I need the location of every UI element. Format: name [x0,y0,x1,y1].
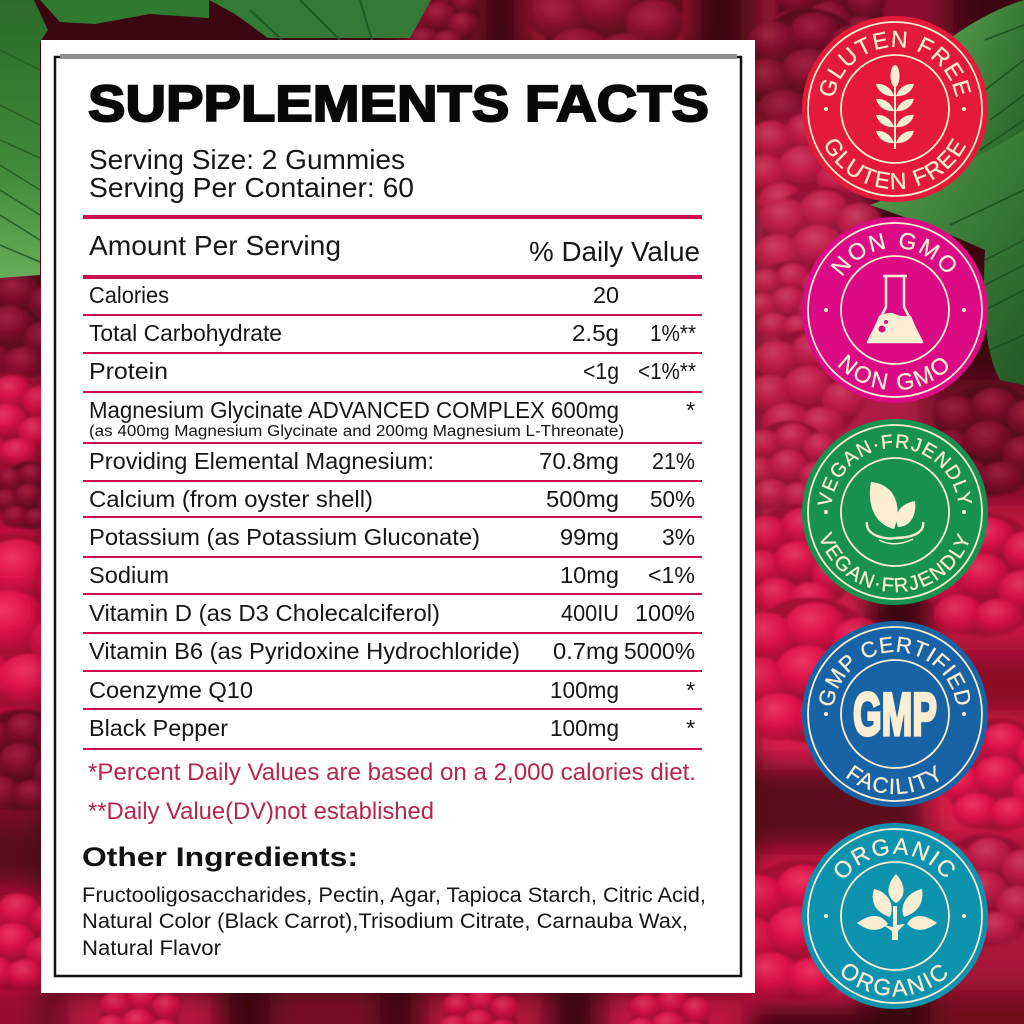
other ingredients list: Natural Flavor [82,937,221,960]
row: coenzyme q10: * [686,677,695,703]
badge: vegan friendly: VEGAN·FRJENDLY [817,434,972,505]
table header: % Daily Value [529,236,700,267]
label frame [55,54,741,976]
row: black pepper: 100mg [550,715,619,741]
badge: non gmo: NON GMO [838,354,948,390]
badge: gluten free [802,16,988,202]
badge: gluten free: GLUTEN FREE [820,30,972,97]
row: potassium: 3% [662,524,695,550]
other ingredients list: Natural Color (Black Carrot),Trisodium Citrate, Carnauba Wax, [82,910,688,933]
row: sodium: <1% [648,562,695,588]
row: protein [89,358,696,384]
row: carbohydrate: Total Carbohydrate [89,320,282,346]
leaf: top left [0,0,431,278]
row: calcium [89,486,695,512]
row: elemental magnesium: Providing Elemental Magnesium: [89,448,434,474]
row: potassium: Potassium (as Potassium Gluconate) [89,524,480,550]
badge: gmp certified [802,621,988,807]
row: vitamin d: 100% [635,600,695,626]
icon: flask [868,276,922,342]
row: vitamin b6: 0.7mg [553,638,619,664]
panel: supplement facts label [41,40,755,993]
row: elemental magnesium: 70.8mg [539,448,619,474]
row: protein: Protein [89,358,168,384]
serving information [89,144,414,203]
footnotes [88,759,696,825]
row: vitamin d [89,600,695,626]
other ingredients list: Fructooligosaccharides, Pectin, Agar, Tapioca Starch, Citric Acid, [82,884,706,907]
row: potassium: 99mg [560,524,619,550]
badge: gluten free: GLUTEN FREE [826,138,966,190]
title: SUPPLEMENTS FACTS [88,75,709,132]
row: elemental magnesium [89,448,695,474]
badge: organic [802,823,988,1009]
row: calcium: 50% [650,486,695,512]
row: magnesium glycinate: Magnesium Glycinate ADVANCED COMPLEX 600mg [89,397,619,423]
row: black pepper [89,715,695,741]
row: elemental magnesium: 21% [652,448,695,474]
row: calories: 20 [593,282,619,308]
footnotes: *Percent Daily Values are based on a 2,000 calories diet. [88,759,696,786]
row: sodium [89,562,695,588]
row: sodium: Sodium [89,562,169,588]
row: calcium: 500mg [546,486,619,512]
serving information: Serving Size: 2 Gummies [89,144,405,175]
icon: GMP lettering: GMP [853,681,937,748]
row: magnesium glycinate: * [686,397,695,423]
row: coenzyme q10: Coenzyme Q10 [89,677,253,703]
badge: gmp certified: GMP CERTIFIED [819,636,970,706]
badge: vegan friendly [802,419,988,605]
badge: vegan friendly: VEGAN·FRJENDLY [820,531,969,592]
row: black pepper: * [686,715,695,741]
row: calcium: Calcium (from oyster shell) [89,486,373,512]
other ingredients heading: Other Ingredients: [82,842,358,872]
row: vitamin b6: 5000% [624,638,695,664]
badge: organic: ORGANIC [842,964,947,997]
row: carbohydrate [89,320,696,346]
row: coenzyme q10 [89,677,695,703]
row: protein: <1g [583,358,619,384]
row: vitamin b6: Vitamin B6 (as Pyridoxine Hydrochloride) [89,638,520,664]
row: coenzyme q10: 100mg [550,677,619,703]
serving information: Serving Per Container: 60 [89,172,414,203]
row: vitamin d: Vitamin D (as D3 Cholecalciferol) [89,600,440,626]
row: calories [89,282,619,308]
icon: sprouting tree [857,874,937,940]
row: carbohydrate: 1%** [650,320,696,346]
badge: non gmo: NON GMO [830,232,956,276]
row: calories: Calories [89,282,169,308]
row: magnesium glycinate: (as 400mg Magnesium Glycinate and 200mg Magnesium L-Threonate) [89,423,624,440]
row: black pepper: Black Pepper [89,715,228,741]
row: potassium [89,524,695,550]
leaf: top right [870,0,1024,385]
row: sodium: 10mg [560,562,619,588]
badge: gmp certified: FACILITY [846,764,939,794]
icon: wheat [876,65,914,149]
row: vitamin d: 400IU [561,600,619,626]
row: magnesium glycinate [89,397,695,440]
badge: organic: ORGANIC [834,838,955,878]
table header: Amount Per Serving [89,230,341,261]
badge: non gmo [802,217,988,403]
other ingredients list [82,884,706,960]
footnotes: **Daily Value(DV)not established [88,798,434,825]
row: carbohydrate: 2.5g [572,320,619,346]
row: protein: <1%** [638,358,696,384]
icon: leaves in bowl [867,482,923,544]
table header [89,230,700,267]
table rules [83,215,702,750]
